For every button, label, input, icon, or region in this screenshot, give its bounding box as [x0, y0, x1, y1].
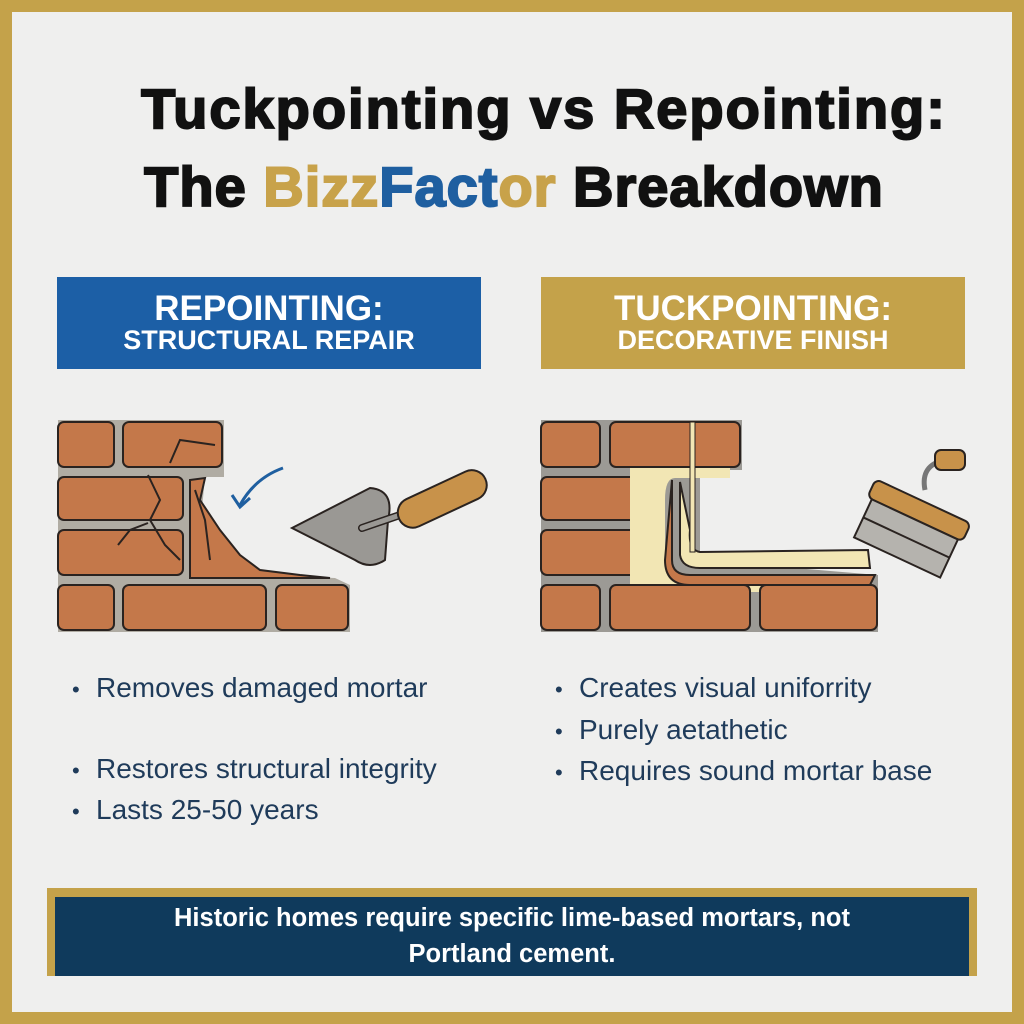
bullets: repointing: Lasts 25-50 years [96, 794, 319, 825]
header: repointing: REPOINTING: [154, 289, 384, 328]
header: repointing [57, 277, 481, 369]
callout banner: Portland cement. [409, 940, 615, 968]
bullets: tuckpointing: Requires sound mortar base [579, 755, 932, 786]
bullets: tuckpointing: • [555, 760, 563, 785]
title line 2: The BizzFactor Breakdown [144, 155, 884, 218]
bullets: repointing: • [72, 677, 80, 702]
bullets: tuckpointing: • [555, 677, 563, 702]
callout banner: Historic homes require specific lime-based mortars, not [174, 904, 850, 932]
bullets: repointing: • [72, 758, 80, 783]
bullets: tuckpointing [555, 672, 932, 786]
bullets: repointing: Removes damaged mortar [96, 672, 427, 703]
bullets: repointing [72, 672, 437, 825]
bullets: tuckpointing: • [555, 719, 563, 744]
header: repointing: STRUCTURAL REPAIR [123, 325, 415, 355]
bullets: repointing: Restores structural integrity [96, 753, 437, 784]
bullets: tuckpointing: Purely aetathetic [579, 714, 788, 745]
bullets: repointing: • [72, 799, 80, 824]
callout banner [47, 888, 977, 976]
trowel [292, 465, 492, 565]
arrow [240, 468, 283, 505]
header: tuckpointing: TUCKPOINTING: [614, 289, 892, 328]
bullets: tuckpointing: Creates visual uniforrity [579, 672, 872, 703]
header: tuckpointing: DECORATIVE FINISH [617, 325, 888, 355]
illustration: tuckpointing wall with tool [541, 420, 971, 632]
header: tuckpointing [541, 277, 965, 369]
title [140, 77, 947, 218]
title line 1: Tuckpointing vs Repointing: [141, 77, 947, 140]
